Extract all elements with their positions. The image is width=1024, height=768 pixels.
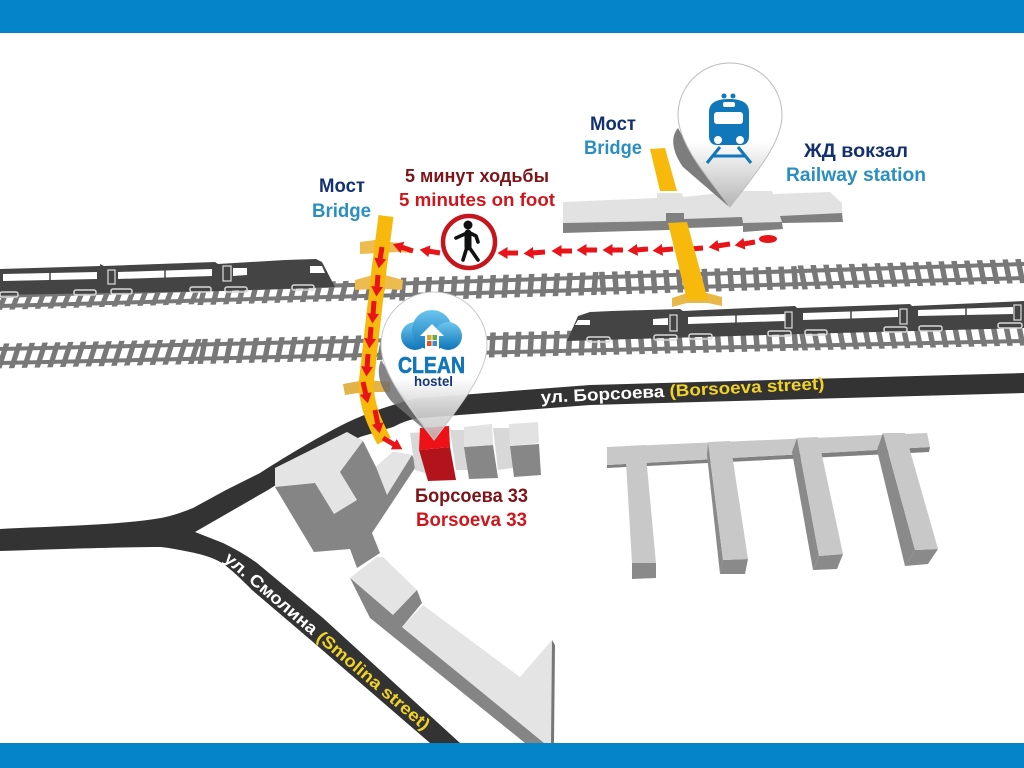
map pin: railway station (673, 63, 782, 207)
label: left bridge: Bridge (312, 201, 371, 222)
building complex right (607, 433, 938, 579)
icon: train (707, 94, 751, 163)
logo text: CLEAN (398, 352, 465, 378)
walking route arrows: station to pedestrian sign (506, 235, 777, 253)
label: hostel address: Borsoeva 33 (416, 510, 527, 531)
icon: walking person (456, 220, 478, 260)
map pin: hostel (379, 292, 487, 440)
building: neighbour 1 (464, 424, 498, 479)
label: railway station (786, 141, 926, 186)
logo text (398, 352, 465, 389)
label: walking time (399, 165, 555, 210)
label: walking time: 5 минут ходьбы (405, 165, 549, 186)
label: right bridge (584, 114, 642, 159)
label: railway station: Railway station (786, 165, 926, 186)
railway track: lower (0, 326, 1024, 363)
railway track: upper (0, 264, 1024, 306)
building: neighbour 2 (509, 422, 541, 477)
train: left (0, 259, 335, 297)
label: walking time: 5 minutes on foot (399, 189, 555, 210)
logo: cloud with house (401, 310, 462, 350)
label: left bridge: Мост (319, 176, 365, 197)
logo text: hostel (414, 374, 453, 389)
label: right bridge: Bridge (584, 138, 642, 159)
pedestrian sign (443, 216, 495, 268)
label: hostel address (415, 486, 528, 531)
label: hostel address: Борсоева 33 (415, 486, 528, 507)
label: railway station: ЖД вокзал (803, 141, 908, 162)
label: right bridge: Мост (590, 114, 636, 135)
roads: Borsoeva and Smolina streets with junction (0, 373, 1024, 743)
train: right (567, 301, 1024, 342)
building: Borsoeva 33 (red) (419, 426, 456, 481)
left bridge (343, 216, 412, 441)
railway station building (563, 191, 843, 233)
bottom blue band (0, 743, 1024, 768)
building row behind hostel (410, 428, 513, 481)
right bridge (650, 148, 722, 307)
building: long block south (350, 557, 555, 743)
label: left bridge (312, 176, 371, 222)
street label: Smolina: ул. Смолина (Smolina street) (220, 549, 434, 734)
walking route arrows: sign to bridge and across bridge (363, 247, 440, 445)
building complex near bridge (275, 432, 417, 568)
street label: Borsoeva: ул. Борсоева (Borsoeva street) (540, 374, 825, 407)
top blue band (0, 0, 1024, 33)
